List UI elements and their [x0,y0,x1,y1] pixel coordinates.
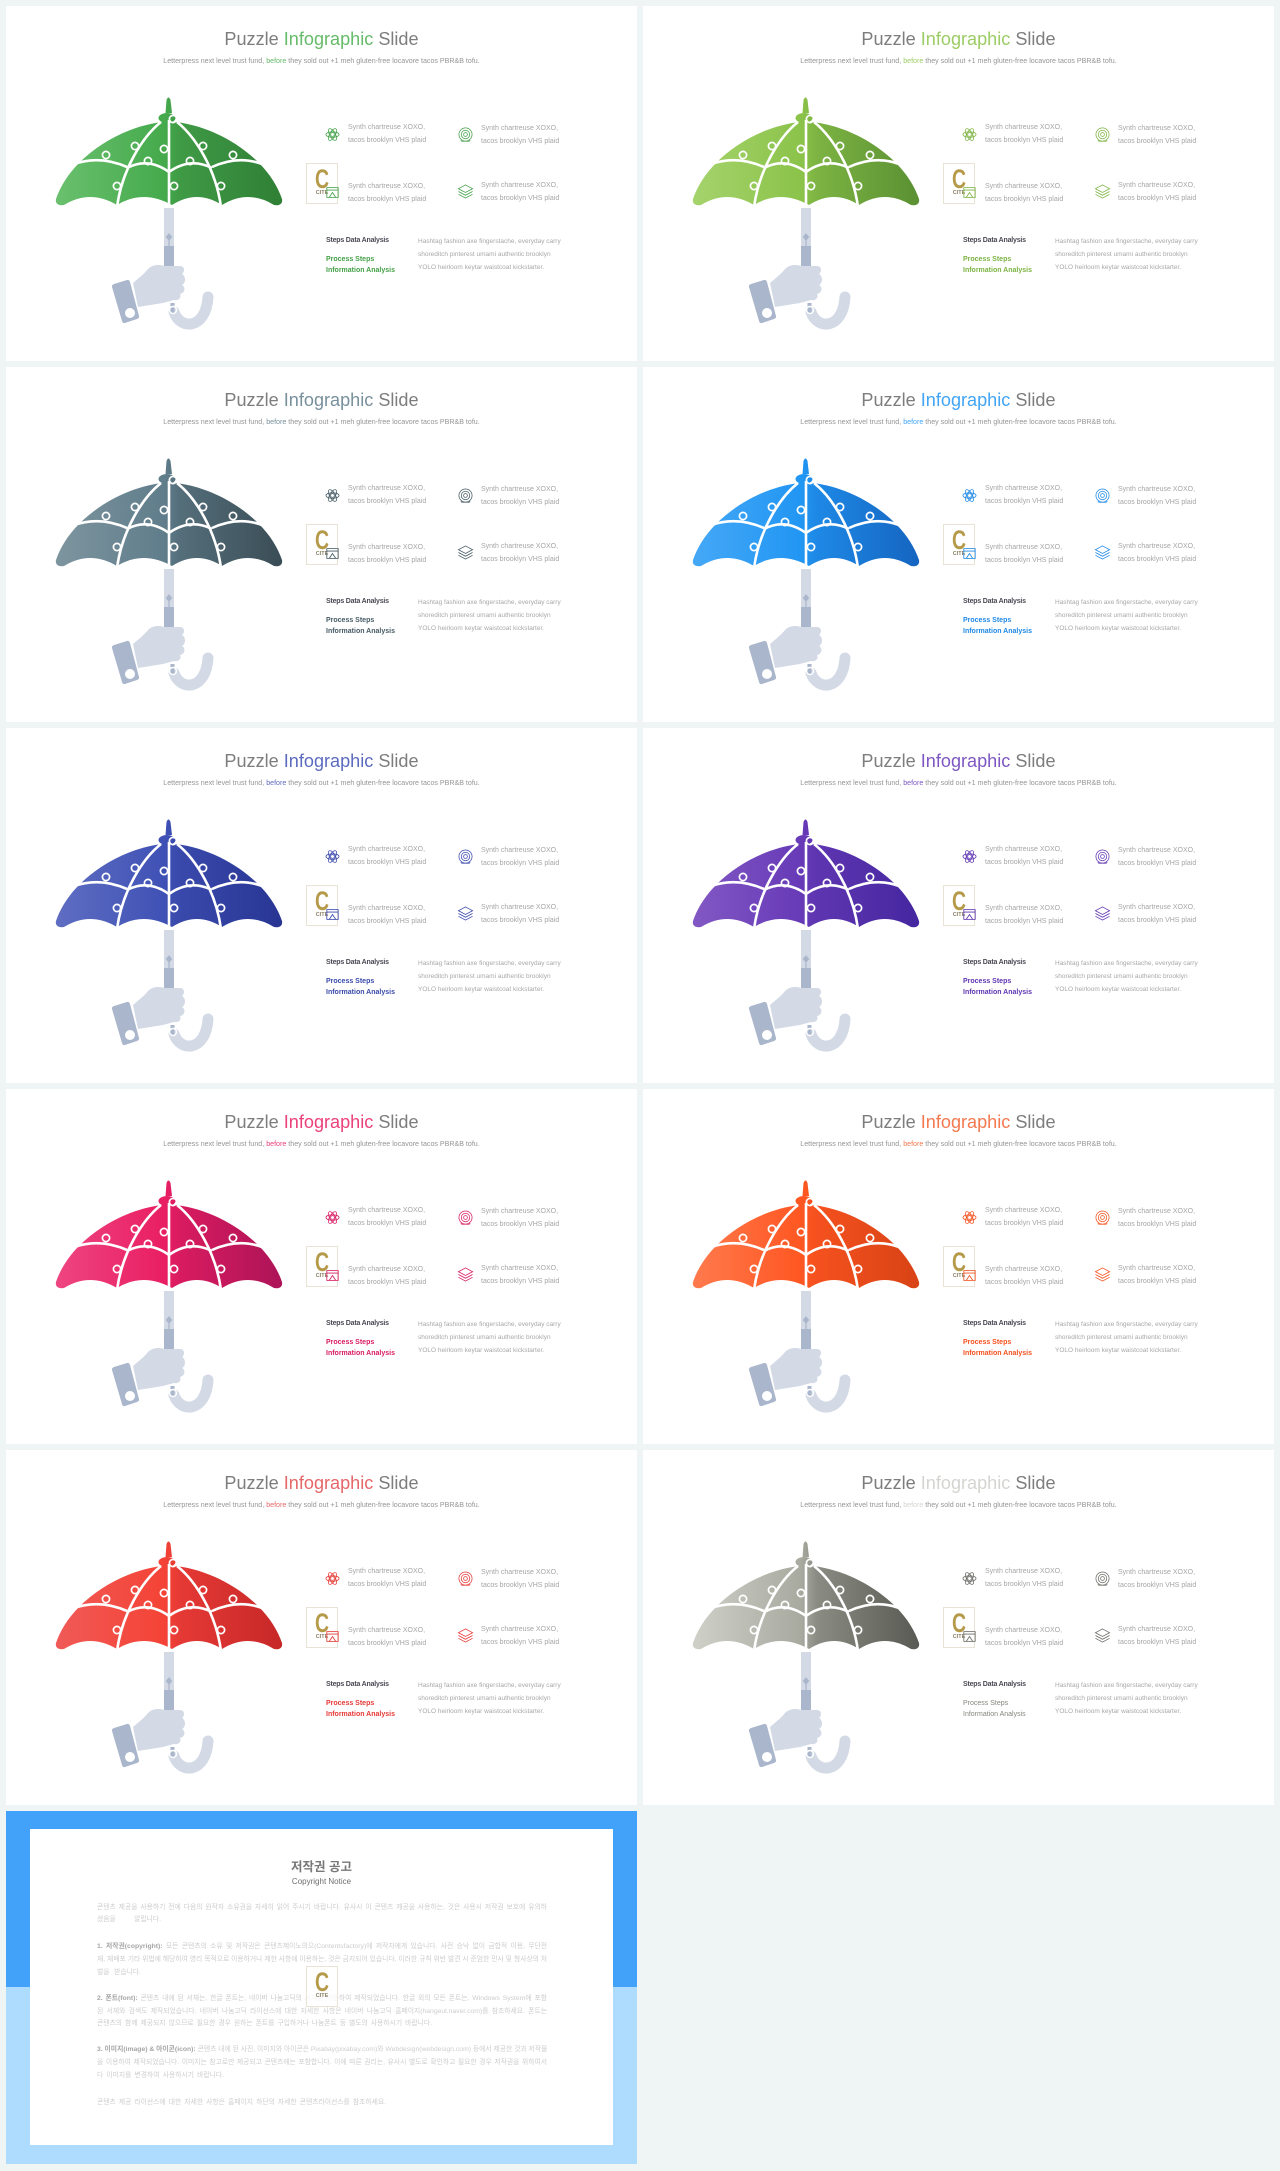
feature 4: tacos brooklyn VHS plaid [1118,917,1196,924]
feature 1 [325,1565,445,1591]
feature 1 [962,484,1063,505]
notice white card: 콘텐츠의 함께 제공되지 않으므로 필요한 경우 원하는 폰트를 구입하거나 나눔폰트 등 별도의 사용하시기 바랍니다. [97,2020,432,2027]
description paragraph: YOLO heirloom keytar waistcoat kickstarter. [418,986,544,993]
steps heading block: Steps Data Analysis [326,1320,389,1327]
panel: copyright notice [6,1811,637,2164]
steps heading block [963,1318,1043,1360]
description paragraph: shoreditch pinterest umami authentic brooklyn [418,251,551,258]
feature 2: Synth chartreuse XOXO, [1118,847,1195,854]
logo badge [306,524,338,565]
feature 2: Synth chartreuse XOXO, [481,486,558,493]
description paragraph: YOLO heirloom keytar waistcoat kickstarter. [1055,986,1181,993]
panel: green umbrella slide [6,6,637,361]
feature 2: Synth chartreuse XOXO, [1118,125,1195,132]
logo badge: CITE [316,551,328,557]
panel: orange umbrella slide [643,1089,1274,1444]
logo badge [943,885,975,926]
umbrella illustration [643,1450,943,1790]
description paragraph: Hashtag fashion axe fingerstache, everyday carry [418,1682,561,1689]
logo badge: CITE [953,190,965,196]
description paragraph [418,599,561,632]
logo badge: CITE [953,912,965,918]
feature 3: tacos brooklyn VHS plaid [985,557,1063,564]
description paragraph [1055,1679,1205,1718]
steps heading block: Process Steps [963,256,1011,263]
subtitle: Letterpress next level trust fund, before they sold out +1 meh gluten-free locavore tacos PBR&B tofu. [800,57,1117,65]
description paragraph: Hashtag fashion axe fingerstache, everyday carry [418,1321,561,1328]
description paragraph: Hashtag fashion axe fingerstache, everyday carry [1055,1321,1198,1328]
feature 3 [963,182,1063,203]
notice white card: 콘텐츠 제공을 사용하기 전에 다음의 원작자 소유권을 자세히 읽어 주시기 바랍니다. 유사시 이 콘텐츠 제공을 사용하는, 것은 사용시 저작권 보호에 유의하 [97,1904,547,1911]
feature 1: Synth chartreuse XOXO, [348,485,425,492]
feature 4 [1094,182,1196,202]
description paragraph [418,1318,568,1357]
feature 4: tacos brooklyn VHS plaid [481,556,559,563]
logo badge: C [315,1608,329,1638]
feature 1 [962,843,1082,869]
feature 4: Synth chartreuse XOXO, [481,1265,558,1272]
description paragraph [418,238,561,271]
feature 3: Synth chartreuse XOXO, [348,1266,425,1273]
feature 1: Synth chartreuse XOXO, [985,485,1062,492]
description paragraph: Hashtag fashion axe fingerstache, everyday carry [1055,1682,1198,1689]
feature 4 [1095,1623,1215,1649]
description paragraph: Hashtag fashion axe fingerstache, everyday carry [1055,960,1198,967]
feature 2 [1096,124,1196,145]
logo badge: CITE [316,1993,328,1999]
description paragraph: YOLO heirloom keytar waistcoat kickstarter. [1055,264,1181,271]
logo badge: C [315,164,329,194]
feature 4: Synth chartreuse XOXO, [481,1626,558,1633]
steps heading block: Steps Data Analysis [326,598,389,605]
description paragraph: YOLO heirloom keytar waistcoat kickstarter. [1055,1708,1181,1715]
description paragraph: Hashtag fashion axe fingerstache, everyday carry [418,599,561,606]
steps heading block: Process Steps [326,1339,374,1346]
panel: blue umbrella slide [643,367,1274,722]
feature 1 [962,1565,1082,1591]
umbrella illustration [692,458,920,691]
logo badge [943,1607,975,1648]
logo badge: C [952,1608,966,1638]
feature 3: Synth chartreuse XOXO, [348,183,425,190]
description paragraph [1055,957,1205,996]
feature 4: tacos brooklyn VHS plaid [1118,195,1196,202]
steps heading block: Process Steps [963,1339,1011,1346]
feature 1: tacos brooklyn VHS plaid [985,498,1063,505]
notice white card: 1. 저작권(copyright): 모든 콘텐츠의 소유 및 저작권은 콘텐츠제이노의으(Contentsfactory)에 저작자에게 있습니다. 사전 승낙 없이 금합적 이용, 무단전 [97,1943,547,1950]
notice subtitle: Copyright Notice [292,1877,351,1886]
feature 1: Synth chartreuse XOXO, [348,1207,425,1214]
feature 2 [1096,486,1196,506]
title: Puzzle Infographic Slide [861,1112,1056,1132]
subtitle: Letterpress next level trust fund, before they sold out +1 meh gluten-free locavore tacos PBR&B tofu. [163,57,480,65]
steps heading block [326,1318,406,1360]
panel: indigo umbrella slide [6,728,637,1083]
intro paragraph [29,1828,31,1830]
feature 1: tacos brooklyn VHS plaid [985,1581,1063,1588]
feature 3 [325,1624,445,1650]
panel: blue-grey umbrella slide [6,367,637,722]
feature 1: Synth chartreuse XOXO, [348,1568,425,1575]
feature 2: Synth chartreuse XOXO, [481,847,558,854]
steps heading block: Steps Data Analysis [963,598,1026,605]
logo badge: C [952,164,966,194]
feature 3: Synth chartreuse XOXO, [985,544,1062,551]
feature 4: tacos brooklyn VHS plaid [481,917,559,924]
feature 4 [1094,542,1196,563]
feature 4 [458,1623,578,1649]
panel: light green umbrella slide [643,6,1274,361]
feature 2 [458,1205,578,1231]
notice title: 저작권 공고 [291,1860,352,1874]
feature 1 [326,484,426,505]
logo badge: CITE [316,1273,328,1279]
steps heading block: Process Steps [963,1700,1008,1707]
feature 1: Synth chartreuse XOXO, [985,124,1062,131]
closing note: 콘텐츠 제공 라이선스에 대한 자세한 사항은 홈페이지 하단의 자세한 콘텐츠라이선스를 참조하세요. [97,2099,386,2106]
description paragraph: YOLO heirloom keytar waistcoat kickstarter. [418,625,544,632]
feature 2 [458,1566,578,1592]
description paragraph: Hashtag fashion axe fingerstache, everyday carry [1055,599,1198,606]
notice white card: 2. 폰트(font): 콘텐츠 내에 된 서체는, 한글 폰트는, 네이버 나눔고딕의 서체를 이용하여 제작되었습니다. 한글 외의 모든 폰트는, Windows System에 포함 [97,1995,547,2002]
umbrella illustration [6,1450,306,1790]
steps heading block: Information Analysis [326,1350,395,1357]
feature 2: tacos brooklyn VHS plaid [1118,1221,1196,1228]
notice white card: 된 서체와 검색도 제작되었습니다. 네이버 나눔고딕 라이선스에 대한 자세한 사항은 네이버 나눔고딕 홈페이지(hangeul.naver.com)를 참조하세요. 폰트는 [97,2008,547,2015]
steps heading block: Steps Data Analysis [963,237,1026,244]
steps heading block: Steps Data Analysis [326,959,389,966]
subtitle: Letterpress next level trust fund, before they sold out +1 meh gluten-free locavore tacos PBR&B tofu. [163,418,480,426]
notice white card: 다 이미지를 변경하여 사용하시기 바랍니다. [97,2072,224,2079]
feature 4 [1095,1262,1215,1288]
feature 3: tacos brooklyn VHS plaid [348,1279,426,1286]
steps heading block: Process Steps [963,978,1011,985]
panel: grey umbrella slide [643,1450,1274,1805]
feature 3: Synth chartreuse XOXO, [985,183,1062,190]
logo badge: C [952,1247,966,1277]
description paragraph: YOLO heirloom keytar waistcoat kickstarter. [418,1347,544,1354]
steps heading block: Steps Data Analysis [326,237,389,244]
title: Puzzle Infographic Slide [224,1112,419,1132]
feature 1: tacos brooklyn VHS plaid [985,137,1063,144]
logo badge: C [315,525,329,555]
feature 1: tacos brooklyn VHS plaid [348,1581,426,1588]
steps heading block: Steps Data Analysis [963,1320,1026,1327]
logo badge [943,524,975,565]
logo badge: C [315,1247,329,1277]
feature 2: Synth chartreuse XOXO, [1118,1208,1195,1215]
logo badge: CITE [953,1634,965,1640]
steps heading block: Process Steps [963,617,1011,624]
feature 1: Synth chartreuse XOXO, [985,1568,1062,1575]
feature 3 [325,902,445,928]
steps heading block: Process Steps [326,617,374,624]
feature 3 [962,1624,1082,1650]
feature 1: Synth chartreuse XOXO, [985,846,1062,853]
feature 1: tacos brooklyn VHS plaid [985,1220,1063,1227]
feature 4: Synth chartreuse XOXO, [481,182,558,189]
feature 3 [962,902,1082,928]
feature 4: tacos brooklyn VHS plaid [1118,556,1196,563]
feature 3 [963,544,1063,564]
title: Puzzle Infographic Slide [224,390,419,410]
description paragraph: YOLO heirloom keytar waistcoat kickstarter. [1055,625,1181,632]
description paragraph [418,957,568,996]
feature 4: Synth chartreuse XOXO, [1118,1265,1195,1272]
steps heading block: Steps Data Analysis [963,1681,1026,1688]
notice white card: 3. 이미지(image) & 아이콘(icon): 콘텐츠 내에 된 사진, 이미지와 아이콘은 Pixabay(pixabay.com)와 Webdesign(webdesign.com) 등에서 제공한 것과 저작물 [97,2046,547,2053]
feature 3: tacos brooklyn VHS plaid [985,1279,1063,1286]
feature 4: Synth chartreuse XOXO, [1118,904,1195,911]
feature 3: Synth chartreuse XOXO, [348,544,425,551]
feature 2: Synth chartreuse XOXO, [1118,1569,1195,1576]
steps heading block: Information Analysis [963,989,1032,996]
feature 1: tacos brooklyn VHS plaid [985,859,1063,866]
feature 2: tacos brooklyn VHS plaid [1118,860,1196,867]
feature 3: tacos brooklyn VHS plaid [348,196,426,203]
feature 2: tacos brooklyn VHS plaid [481,1582,559,1589]
logo badge: CITE [953,1273,965,1279]
steps heading block [326,1679,406,1721]
feature 2 [1095,1205,1215,1231]
feature 4: Synth chartreuse XOXO, [481,543,558,550]
description paragraph: Hashtag fashion axe fingerstache, everyday carry [418,238,561,245]
feature 1: tacos brooklyn VHS plaid [348,137,426,144]
logo badge [306,163,338,204]
steps heading block: Information Analysis [963,267,1032,274]
feature 3: tacos brooklyn VHS plaid [348,918,426,925]
description paragraph [1055,238,1198,271]
logo badge [306,1607,338,1648]
feature 3: Synth chartreuse XOXO, [985,1627,1062,1634]
feature 3 [962,1263,1082,1289]
feature 4 [1095,901,1215,927]
feature 1: Synth chartreuse XOXO, [348,124,425,131]
umbrella illustration [692,98,920,330]
steps heading block [963,236,1032,274]
feature 2 [458,124,559,145]
feature 3: tacos brooklyn VHS plaid [985,196,1063,203]
description paragraph: shoreditch pinterest umami authentic brooklyn [1055,1695,1188,1702]
umbrella illustration [56,98,282,330]
logo badge [306,1966,338,2007]
feature 3: tacos brooklyn VHS plaid [985,1640,1063,1647]
description paragraph: shoreditch pinterest umami authentic brooklyn [1055,612,1188,619]
description paragraph: shoreditch pinterest umami authentic brooklyn [418,1695,551,1702]
umbrella illustration [6,1089,306,1429]
feature 2: Synth chartreuse XOXO, [481,1208,558,1215]
steps heading block: Information Analysis [963,1350,1032,1357]
steps heading block: Information Analysis [326,628,395,635]
feature 4 [458,182,559,202]
feature 3 [325,1263,445,1289]
subtitle: Letterpress next level trust fund, before they sold out +1 meh gluten-free locavore tacos PBR&B tofu. [800,418,1117,426]
feature 4: tacos brooklyn VHS plaid [1118,1278,1196,1285]
logo badge: C [315,886,329,916]
description paragraph: shoreditch pinterest umami authentic brooklyn [418,973,551,980]
title: Puzzle Infographic Slide [861,1473,1056,1493]
feature 3: tacos brooklyn VHS plaid [985,918,1063,925]
logo badge: CITE [316,190,328,196]
feature 1: tacos brooklyn VHS plaid [348,1220,426,1227]
feature 1 [962,1204,1082,1230]
subtitle: Letterpress next level trust fund, before they sold out +1 meh gluten-free locavore tacos PBR&B tofu. [163,779,480,787]
steps heading block: Process Steps [326,1700,374,1707]
steps heading block: Information Analysis [963,628,1032,635]
description paragraph: YOLO heirloom keytar waistcoat kickstarter. [1055,1347,1181,1354]
feature 4 [458,542,559,563]
description paragraph [1055,599,1198,632]
description paragraph: shoreditch pinterest umami authentic brooklyn [1055,973,1188,980]
description paragraph [418,1679,568,1718]
feature 3: tacos brooklyn VHS plaid [348,557,426,564]
title: Puzzle Infographic Slide [224,751,419,771]
steps heading block: Information Analysis [326,267,395,274]
feature 1: tacos brooklyn VHS plaid [348,498,426,505]
feature 3: Synth chartreuse XOXO, [348,905,425,912]
feature 4: tacos brooklyn VHS plaid [481,195,559,202]
feature 4: tacos brooklyn VHS plaid [1118,1639,1196,1646]
description paragraph: shoreditch pinterest umami authentic brooklyn [1055,1334,1188,1341]
steps heading block [963,598,1032,635]
feature 1: Synth chartreuse XOXO, [985,1207,1062,1214]
feature 2: tacos brooklyn VHS plaid [481,138,559,145]
logo badge: CITE [316,912,328,918]
feature 2 [458,486,559,506]
panel: pink umbrella slide [6,1089,637,1444]
steps heading block [326,598,395,635]
feature 2: tacos brooklyn VHS plaid [481,1221,559,1228]
steps heading block: Steps Data Analysis [326,1681,389,1688]
feature 2: Synth chartreuse XOXO, [481,125,558,132]
description paragraph: YOLO heirloom keytar waistcoat kickstarter. [418,1708,544,1715]
panel: purple umbrella slide [643,728,1274,1083]
feature 2: tacos brooklyn VHS plaid [1118,1582,1196,1589]
subtitle: Letterpress next level trust fund, before they sold out +1 meh gluten-free locavore tacos PBR&B tofu. [800,1140,1117,1148]
feature 3 [326,182,426,203]
umbrella illustration [643,1089,943,1429]
steps heading block [963,1679,1043,1721]
notice white card: 을 이용하여 제작되었습니다. 이미지는 참고로만 제공되고 콘텐츠에는 포함합니다. 이에 따른 권리는, 유사시 별도로 확인하고 필요한 경우 저작권을 위하여서 [97,2059,547,2066]
notice white card: 재, 재배포 기타 위법에 해당하여 영리 목적으로 이용하거나 제한 사항에 이용하는, 것은 금지되어 있습니다. 이러한 규칙 위반 발견 시 준엄한 민사 및 형사상의 처 [97,1956,547,1963]
logo badge [306,885,338,926]
subtitle: Letterpress next level trust fund, before they sold out +1 meh gluten-free locavore tacos PBR&B tofu. [163,1501,480,1509]
section 3 image and icon [29,1828,31,1830]
feature 3: tacos brooklyn VHS plaid [348,1640,426,1647]
logo badge [943,1246,975,1287]
notice white card: 벌을 받습니다. [97,1969,141,1976]
umbrella illustration [56,458,282,691]
steps heading block: Process Steps [326,256,374,263]
subtitle: Letterpress next level trust fund, before they sold out +1 meh gluten-free locavore tacos PBR&B tofu. [800,779,1117,787]
feature 1: Synth chartreuse XOXO, [348,846,425,853]
feature 4 [458,1262,578,1288]
title: Puzzle Infographic Slide [861,751,1056,771]
title: Puzzle Infographic Slide [861,29,1056,49]
feature 4: Synth chartreuse XOXO, [1118,182,1195,189]
description paragraph [1055,1318,1205,1357]
steps heading block: Process Steps [326,978,374,985]
feature 3: Synth chartreuse XOXO, [985,1266,1062,1273]
subtitle: Letterpress next level trust fund, before they sold out +1 meh gluten-free locavore tacos PBR&B tofu. [800,1501,1117,1509]
steps heading block [326,236,395,274]
section 1 copyright [29,1828,31,1830]
logo badge: CITE [953,551,965,557]
description paragraph: shoreditch pinterest umami authentic brooklyn [1055,251,1188,258]
feature 2: tacos brooklyn VHS plaid [1118,138,1196,145]
steps heading block: Information Analysis [326,1711,395,1718]
feature 2: tacos brooklyn VHS plaid [481,499,559,506]
feature 2 [1095,844,1215,870]
feature 3 [326,544,426,564]
description paragraph: Hashtag fashion axe fingerstache, everyday carry [418,960,561,967]
steps heading block: Information Analysis [963,1711,1026,1718]
section 2 font [29,1828,31,1830]
logo badge: C [315,1967,329,1997]
feature 2: Synth chartreuse XOXO, [481,1569,558,1576]
feature 1: tacos brooklyn VHS plaid [348,859,426,866]
title: Puzzle Infographic Slide [861,390,1056,410]
feature 3: Synth chartreuse XOXO, [348,1627,425,1634]
feature 2 [1095,1566,1215,1592]
feature 2: Synth chartreuse XOXO, [1118,486,1195,493]
steps heading block: Information Analysis [326,989,395,996]
logo badge [306,1246,338,1287]
feature 3: Synth chartreuse XOXO, [985,905,1062,912]
feature 2: tacos brooklyn VHS plaid [1118,499,1196,506]
feature 2: tacos brooklyn VHS plaid [481,860,559,867]
feature 4 [458,901,578,927]
feature 4: Synth chartreuse XOXO, [1118,1626,1195,1633]
feature 1 [962,124,1063,144]
steps heading block [326,957,406,999]
title: Puzzle Infographic Slide [224,29,419,49]
feature 1 [326,846,426,866]
feature 4: Synth chartreuse XOXO, [481,904,558,911]
steps heading block [963,957,1043,999]
feature 1 [326,124,426,144]
umbrella illustration [56,820,282,1052]
notice white card: 셨음을 알립니다. [97,1916,161,1923]
subtitle: Letterpress next level trust fund, before they sold out +1 meh gluten-free locavore tacos PBR&B tofu. [163,1140,480,1148]
umbrella illustration [643,728,943,1068]
logo badge: C [952,525,966,555]
notice white card [30,1829,613,2145]
panel: red umbrella slide [6,1450,637,1805]
feature 4: tacos brooklyn VHS plaid [481,1639,559,1646]
logo badge: C [952,886,966,916]
description paragraph: YOLO heirloom keytar waistcoat kickstarter. [418,264,544,271]
description paragraph: shoreditch pinterest umami authentic brooklyn [418,1334,551,1341]
title: Puzzle Infographic Slide [224,1473,419,1493]
feature 2 [458,844,578,870]
logo badge: CITE [316,1634,328,1640]
steps heading block: Steps Data Analysis [963,959,1026,966]
feature 1 [325,1204,445,1230]
feature 4: tacos brooklyn VHS plaid [481,1278,559,1285]
description paragraph: shoreditch pinterest umami authentic brooklyn [418,612,551,619]
description paragraph: Hashtag fashion axe fingerstache, everyday carry [1055,238,1198,245]
logo badge [943,163,975,204]
feature 4: Synth chartreuse XOXO, [1118,543,1195,550]
